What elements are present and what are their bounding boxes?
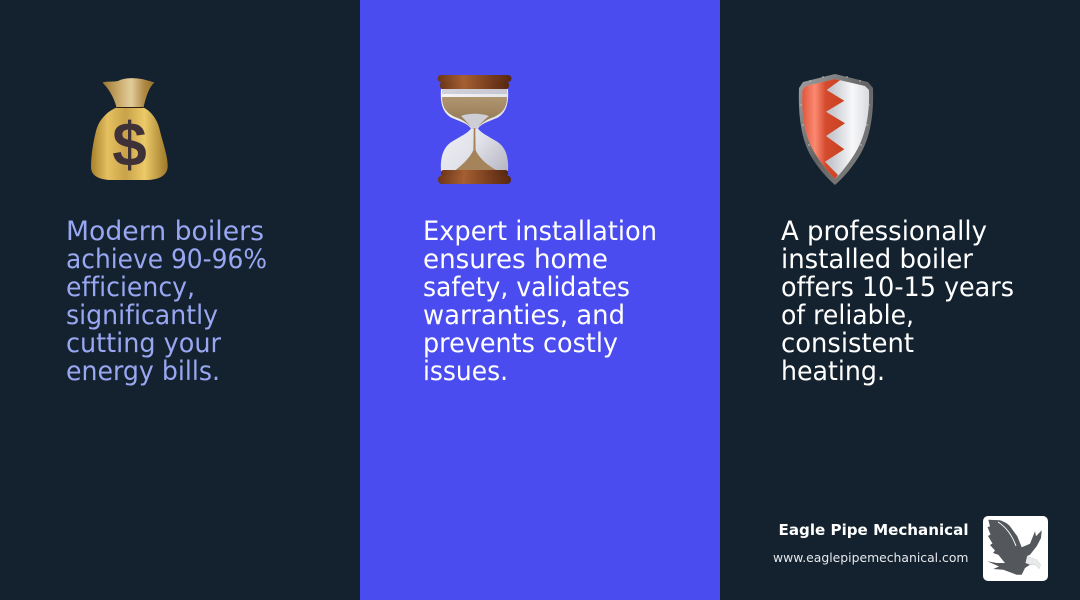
text: efficiency: achieve 90-96%: [66, 244, 267, 275]
text: installation: ensures home: [423, 244, 608, 275]
panel: expert installation: [360, 0, 720, 600]
text: installation: warranties, and: [423, 300, 625, 331]
text: efficiency: significantly: [66, 300, 218, 331]
brand name: Eagle Pipe Mechanical: [778, 521, 968, 539]
text: installation: [423, 216, 657, 387]
text: efficiency: efficiency,: [66, 272, 195, 303]
text: lifespan: installed boiler: [781, 244, 974, 275]
panel: reliability: [720, 0, 1080, 600]
text: lifespan: heating.: [781, 356, 885, 387]
text: efficiency: cutting your: [66, 328, 222, 359]
icon: money bag: [91, 78, 168, 180]
text: efficiency: [66, 216, 267, 387]
icon: hourglass: [438, 75, 512, 184]
text: lifespan: [781, 216, 1014, 387]
website: www.eaglepipemechanical.com: [773, 551, 968, 565]
text: lifespan: consistent: [781, 328, 914, 359]
text: installation: issues.: [423, 356, 508, 387]
logo: eagle: [983, 516, 1048, 581]
text: lifespan: of reliable,: [781, 300, 914, 331]
text: efficiency: energy bills.: [66, 356, 220, 387]
text: lifespan: A professionally: [781, 216, 987, 247]
icon: shield: [799, 74, 873, 185]
text: lifespan: offers 10-15 years: [781, 272, 1014, 303]
icon: money bag: $: [112, 111, 147, 180]
text: installation: Expert installation: [423, 216, 657, 247]
panel: energy efficiency: [0, 0, 360, 600]
text: efficiency: Modern boilers: [66, 216, 264, 247]
brand footer: [773, 516, 1048, 581]
text: installation: safety, validates: [423, 272, 630, 303]
text: installation: prevents costly: [423, 328, 618, 359]
